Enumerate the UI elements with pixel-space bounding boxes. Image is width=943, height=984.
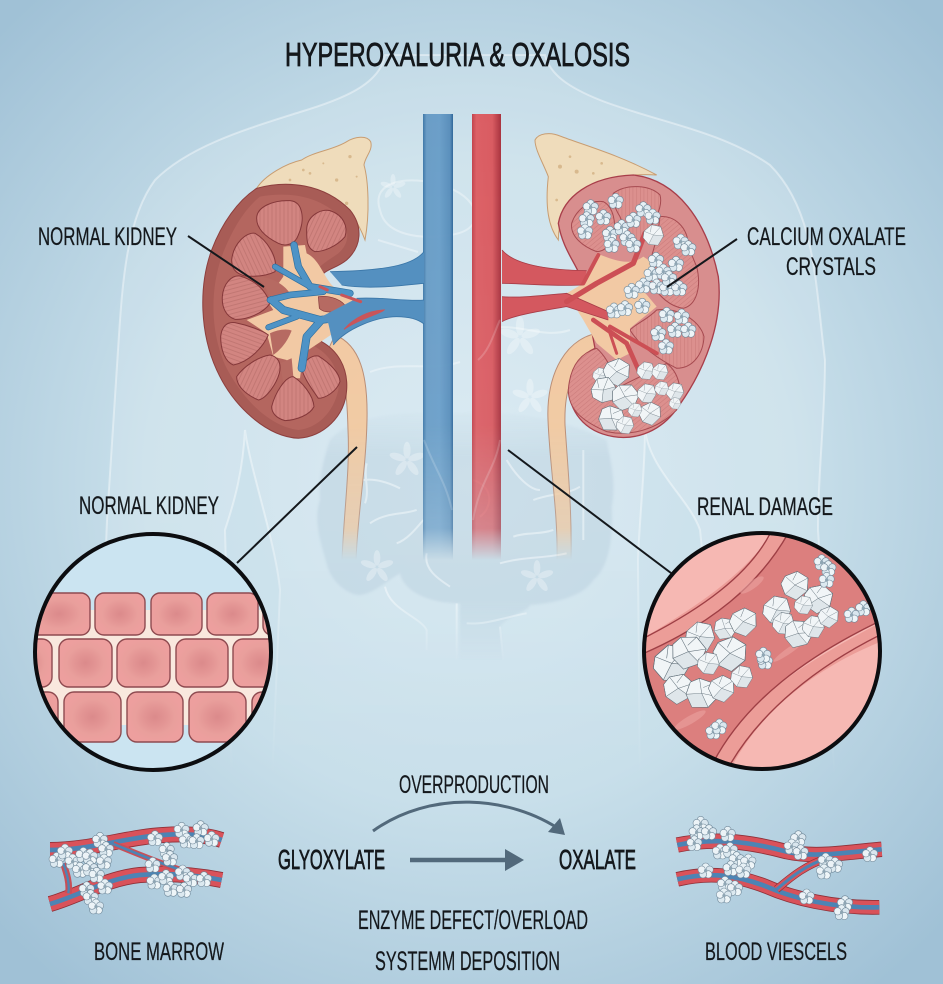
ghost organs	[317, 174, 613, 660]
large crystals	[587, 225, 684, 436]
leader line: normal kidney	[188, 236, 264, 287]
bone marrow vessels	[49, 821, 222, 914]
label: normal kidney, upper: NORMAL KIDNEY	[38, 223, 177, 251]
magnifier: damaged tubule with crystals	[640, 530, 900, 770]
diseased kidney illustration	[502, 134, 719, 437]
normal kidney illustration	[203, 137, 424, 438]
adrenal gland	[535, 134, 657, 240]
leader line: right magnifier	[508, 450, 671, 573]
colon	[318, 434, 613, 634]
label: enzyme defect: ENZYME DEFECT/OVERLOAD	[358, 905, 588, 935]
vein	[423, 114, 453, 560]
pyramids	[221, 201, 346, 421]
label: calcium oxalate crystals: CRYSTALS	[786, 253, 876, 281]
kidney body	[558, 175, 719, 437]
leader line: crystals	[667, 239, 737, 287]
label: bone marrow: BONE MARROW	[94, 938, 224, 966]
adrenal gland	[257, 137, 371, 240]
crystal clusters	[577, 193, 696, 354]
leader line: left magnifier	[237, 447, 357, 563]
artery	[472, 114, 501, 560]
great vessels	[423, 114, 501, 560]
label: overproduction: OVERPRODUCTION	[399, 771, 549, 799]
label: systemic deposition: SYSTEMM DEPOSITION	[375, 946, 560, 976]
magnifier: normal tubule cells	[33, 532, 273, 772]
label: renal damage: RENAL DAMAGE	[697, 493, 833, 521]
arrow: conversion	[410, 849, 524, 871]
blood vessels	[677, 816, 882, 920]
title: HYPEROXALURIA & OXALOSIS	[285, 36, 630, 73]
label: oxalate: OXALATE	[559, 844, 636, 875]
lobes	[568, 187, 704, 433]
renal sinus	[567, 253, 657, 360]
renal sinus	[247, 245, 363, 378]
label: normal kidney, magnifier: NORMAL KIDNEY	[79, 492, 219, 520]
renal arteries	[502, 250, 608, 322]
ureter: left	[328, 335, 367, 560]
renal veins	[320, 252, 424, 345]
ureter: right	[547, 334, 594, 557]
label: glyoxylate: GLYOXYLATE	[278, 844, 385, 875]
arrow: overproduction curve	[373, 802, 565, 835]
kidney body	[203, 184, 359, 438]
renal vein branches	[268, 245, 350, 368]
label: blood vessels: BLOOD VIESCELS	[705, 938, 847, 966]
body silhouette	[105, 54, 826, 690]
inner lobes	[257, 277, 347, 383]
